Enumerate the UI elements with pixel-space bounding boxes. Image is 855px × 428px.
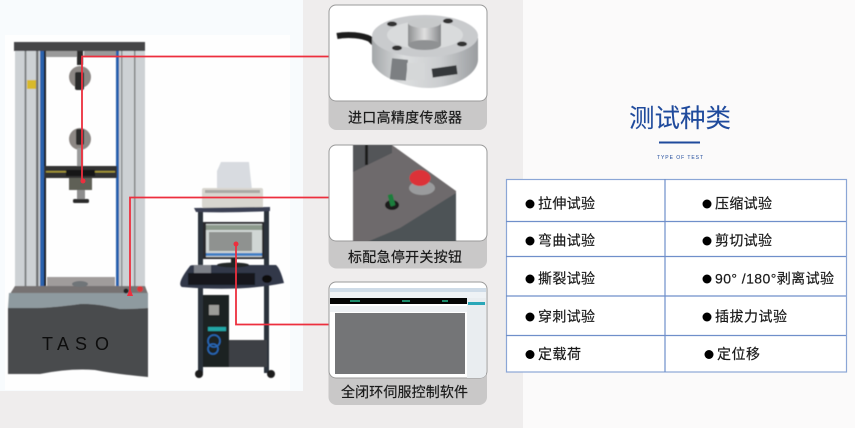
heading: test types: TYPE OF TEST bbox=[657, 155, 703, 161]
machine logo: TASO bbox=[42, 334, 109, 354]
table item: 压缩试验 bbox=[715, 196, 772, 212]
red connector: emergency stop bbox=[127, 198, 330, 296]
upper grip bbox=[69, 51, 91, 90]
monitor bbox=[203, 222, 264, 268]
panel: emergency stop card bbox=[328, 144, 487, 268]
panel: software card bbox=[328, 282, 487, 405]
panel: sensor card bbox=[328, 4, 487, 130]
lower grip bbox=[69, 128, 91, 168]
printer bbox=[202, 162, 263, 208]
red connector: software bbox=[234, 242, 330, 324]
computer cart bbox=[180, 162, 284, 378]
machine top beam bbox=[14, 42, 145, 51]
crosshead bbox=[44, 166, 117, 203]
table item: 定载荷 bbox=[538, 346, 581, 362]
caption: 全闭环伺服控制软件 bbox=[341, 384, 468, 400]
keyboard and mouse bbox=[188, 265, 272, 285]
table item: 穿刺试验 bbox=[538, 308, 595, 324]
table: test types bbox=[506, 179, 846, 372]
icon: load cell bbox=[337, 15, 478, 88]
table item: 撕裂试验 bbox=[538, 270, 595, 286]
table item: 拉伸试验 bbox=[538, 196, 595, 212]
testing machine bbox=[8, 42, 148, 377]
caption: 进口高精度传感器 bbox=[348, 110, 462, 126]
computer tower bbox=[203, 295, 229, 367]
heading: test types bbox=[629, 105, 731, 161]
red connector: sensor bbox=[80, 56, 330, 184]
table item: 插拔力试验 bbox=[715, 308, 787, 324]
icon: machine console bbox=[353, 145, 456, 242]
cart frame bbox=[180, 207, 284, 378]
icon: software screenshot bbox=[330, 288, 486, 382]
heading: test types: 测试种类 bbox=[629, 105, 731, 133]
table item: 定位移 bbox=[717, 346, 760, 362]
table item: 弯曲试验 bbox=[538, 232, 595, 248]
machine base bbox=[8, 277, 148, 377]
caption: 标配急停开关按钮 bbox=[348, 249, 462, 265]
table item: 剪切试验 bbox=[715, 232, 772, 248]
table item: 90° /180°剥离试验 bbox=[715, 270, 834, 286]
machine columns bbox=[15, 50, 145, 290]
